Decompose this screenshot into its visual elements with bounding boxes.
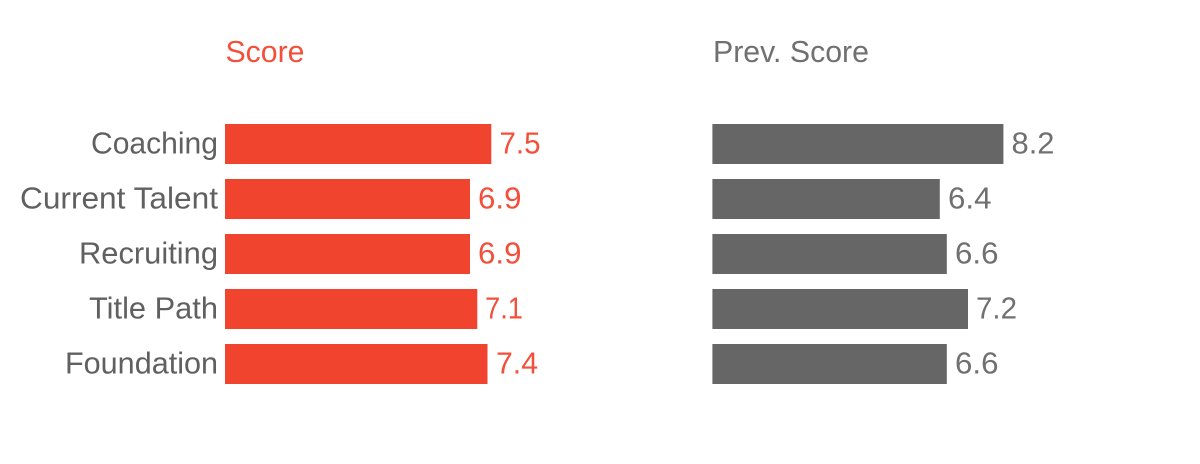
bar: Current Talent 6.4 [712, 179, 940, 219]
value: 8.2: 8.2 [1012, 126, 1054, 160]
bar: Coaching 7.5 [225, 124, 491, 164]
bar: Recruiting 6.6 [712, 234, 947, 274]
label: Current Talent: Current Talent [20, 180, 218, 216]
label: Title Path: Title Path [89, 290, 218, 326]
value: 6.9: 6.9 [478, 236, 522, 270]
value: 6.6: 6.6 [955, 236, 998, 270]
value: 6.9: 6.9 [478, 180, 522, 216]
bar: Foundation 7.4 [225, 344, 488, 384]
bar: Title Path 7.1 [225, 289, 477, 329]
label: Coaching: Coaching [91, 126, 218, 160]
panel: row labels [20, 126, 218, 380]
value: 7.2: 7.2 [976, 290, 1017, 326]
value: 7.5: 7.5 [500, 126, 540, 160]
value: 7.1: 7.1 [485, 290, 523, 326]
heading: Score: Score [226, 34, 304, 69]
bar: Coaching 8.2 [712, 124, 1003, 164]
value: 6.4: 6.4 [948, 180, 992, 216]
panel: Score bar chart [225, 34, 540, 384]
bar: Current Talent 6.9 [225, 179, 470, 219]
bar: Foundation 6.6 [712, 344, 947, 384]
heading: Prev. Score: Prev. Score [713, 34, 869, 69]
label: Recruiting: Recruiting [79, 236, 218, 270]
bar: Title Path 7.2 [712, 289, 968, 329]
bar: Recruiting 6.9 [225, 234, 470, 274]
label: Foundation: Foundation [65, 346, 218, 380]
value: 6.6: 6.6 [955, 346, 998, 380]
panel: Prev. Score bar chart [712, 34, 1054, 384]
value: 7.4: 7.4 [496, 346, 538, 380]
